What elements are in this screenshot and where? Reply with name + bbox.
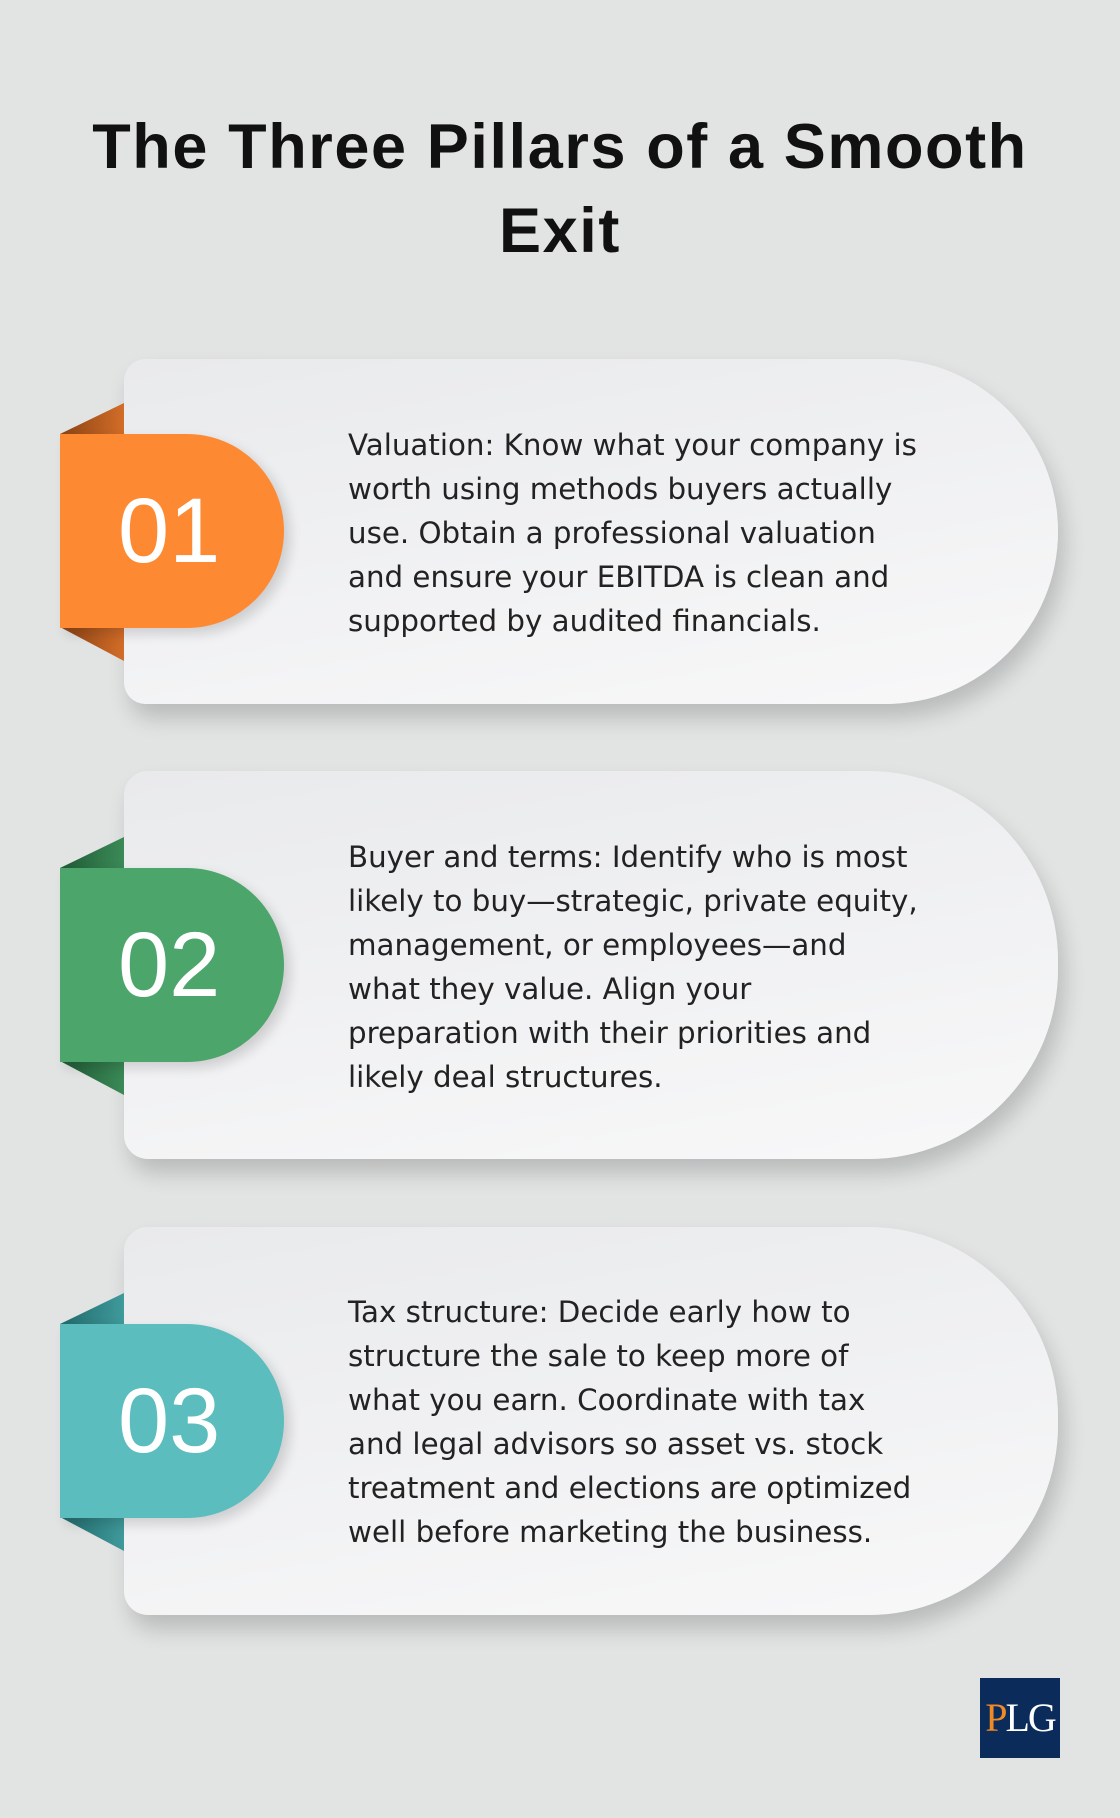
logo	[980, 1678, 1060, 1758]
fold: card 2	[60, 837, 124, 1095]
badge 01	[60, 434, 284, 628]
text 3: what you earn. Coordinate with tax	[348, 1383, 865, 1417]
text 3: well before marketing the business.	[348, 1515, 872, 1549]
title	[92, 112, 1028, 266]
text 2: management, or employees—and	[348, 928, 846, 962]
logo: PLG	[985, 1695, 1055, 1740]
panel: card 3	[124, 1227, 1058, 1615]
title: The Three Pillars of a Smooth	[92, 112, 1028, 182]
badge 02: 02	[118, 914, 220, 1016]
text 1	[348, 428, 917, 638]
badge 03: 03	[118, 1370, 220, 1472]
text 3	[348, 1295, 911, 1549]
text 2: Buyer and terms: Identify who is most	[348, 840, 907, 874]
text 2: likely deal structures.	[348, 1060, 663, 1094]
text 1: use. Obtain a professional valuation	[348, 516, 876, 550]
text 1: supported by audited financials.	[348, 604, 821, 638]
fold: card 3	[60, 1293, 124, 1551]
title: Exit	[499, 196, 621, 266]
text 3: structure the sale to keep more of	[348, 1339, 848, 1373]
badge 02	[60, 868, 284, 1062]
badge 01: 01	[118, 480, 220, 582]
text 3: and legal advisors so asset vs. stock	[348, 1427, 883, 1461]
text 2: preparation with their priorities and	[348, 1016, 871, 1050]
text 2: likely to buy—strategic, private equity,	[348, 884, 918, 918]
panel: card 1	[124, 359, 1058, 704]
panel: card 2	[124, 771, 1058, 1159]
text 1: Valuation: Know what your company is	[348, 428, 917, 462]
text 3: Tax structure: Decide early how to	[348, 1295, 851, 1329]
text 1: and ensure your EBITDA is clean and	[348, 560, 889, 594]
text 1: worth using methods buyers actually	[348, 472, 892, 506]
text 2: what they value. Align your	[348, 972, 751, 1006]
text 3: treatment and elections are optimized	[348, 1471, 911, 1505]
badge 03	[60, 1324, 284, 1518]
fold: card 1	[60, 403, 124, 661]
text 2	[348, 840, 918, 1094]
